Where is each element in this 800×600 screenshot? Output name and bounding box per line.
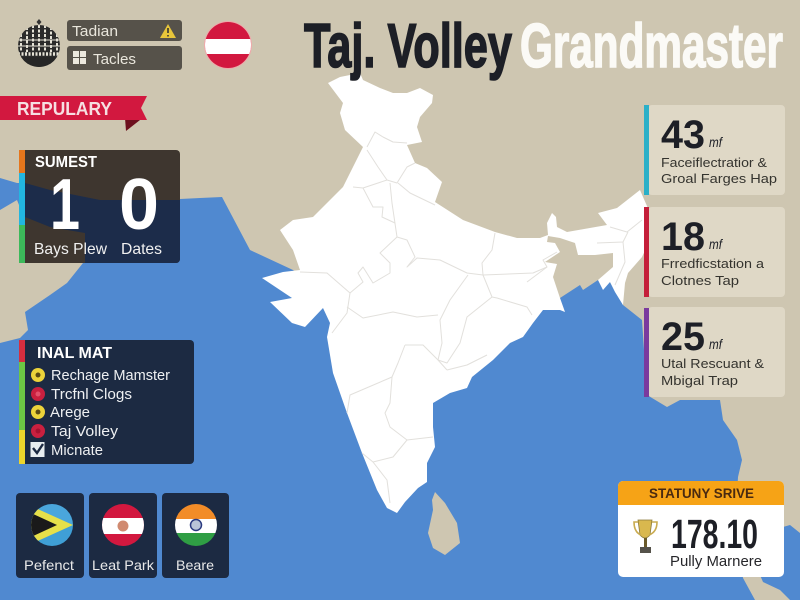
score card: Statuny Srive	[618, 481, 784, 577]
stat card: 43: 43	[661, 113, 705, 157]
pill: Tadian: Tadian	[72, 23, 118, 40]
india outline	[262, 73, 650, 513]
label: Dates: Dates	[121, 241, 162, 258]
item: Micnate: Micnate	[51, 442, 103, 459]
stat card: 18: Frredficstation a	[661, 256, 765, 271]
stat card: 43	[644, 105, 785, 195]
ribbon: Repulary	[0, 96, 147, 131]
stat card: 18	[644, 207, 785, 297]
icon: red white flag	[102, 504, 144, 546]
icon: top flag	[204, 21, 252, 69]
pill: Tadian	[67, 20, 182, 41]
stat card: 25: mf	[709, 336, 724, 352]
item: Arege: Arege	[50, 404, 90, 421]
heading: INAL MAT	[37, 345, 112, 362]
icon: flag with chevron	[31, 504, 73, 546]
card: Pefenct: Pefenct	[24, 557, 74, 573]
icon: grid	[73, 51, 86, 64]
icon: warning triangle	[160, 24, 176, 38]
card: Beare	[162, 493, 229, 578]
card: Pefenct	[16, 493, 84, 578]
item: Arege	[31, 404, 90, 421]
card: Beare: Beare	[176, 557, 214, 573]
panel: Inal Mat legend	[19, 340, 194, 464]
item: Taj Volley: Taj Volley	[51, 423, 119, 440]
heading: SUMEST	[35, 154, 97, 171]
card: Leat Park	[89, 493, 157, 578]
state borders	[300, 132, 642, 503]
stat card: 43: mf	[709, 134, 724, 150]
pill: Tacles: Tacles	[93, 51, 136, 68]
score card: Statuny Srive: Pully Marnere	[670, 554, 762, 570]
item: Rechage Mamster: Rechage Mamster	[51, 367, 170, 384]
panel: Sumest	[19, 150, 180, 263]
ribbon: Repulary: REPULARY	[17, 99, 112, 119]
number 0: 0	[119, 165, 159, 245]
sea	[0, 178, 755, 600]
stat card: 43: Groal Farges Hap	[661, 171, 777, 186]
stat card: 43: Faceiflectratior &	[661, 155, 767, 170]
stat card: 25: 25	[661, 315, 705, 359]
stat card: 25	[644, 307, 785, 397]
score card: Statuny Srive: STATUNY SRIVE	[649, 485, 754, 501]
item: Trcfnl Clogs: Trcfnl Clogs	[51, 386, 132, 403]
icon: trophy	[634, 520, 657, 553]
label: Bays Plew: Bays Plew	[34, 241, 107, 258]
title	[304, 12, 783, 81]
stat card: 18: 18	[661, 215, 705, 259]
icon: globe emblem	[18, 19, 60, 67]
icon: india flag	[175, 504, 217, 546]
title: Taj. Volley	[304, 12, 512, 81]
card: Leat Park: Leat Park	[92, 557, 155, 573]
score card: Statuny Srive: 178.10	[671, 511, 758, 557]
pill: Tacles	[67, 46, 182, 70]
number 1: 1	[50, 165, 80, 245]
stat card: 25: Utal Rescuant &	[661, 356, 764, 371]
stat card: 18: Clotnes Tap	[661, 273, 739, 288]
stat card: 18: mf	[709, 236, 724, 252]
sea patch at lower right	[760, 525, 800, 600]
sri lanka	[428, 492, 460, 555]
stat card: 25: Mbigal Trap	[661, 373, 738, 388]
